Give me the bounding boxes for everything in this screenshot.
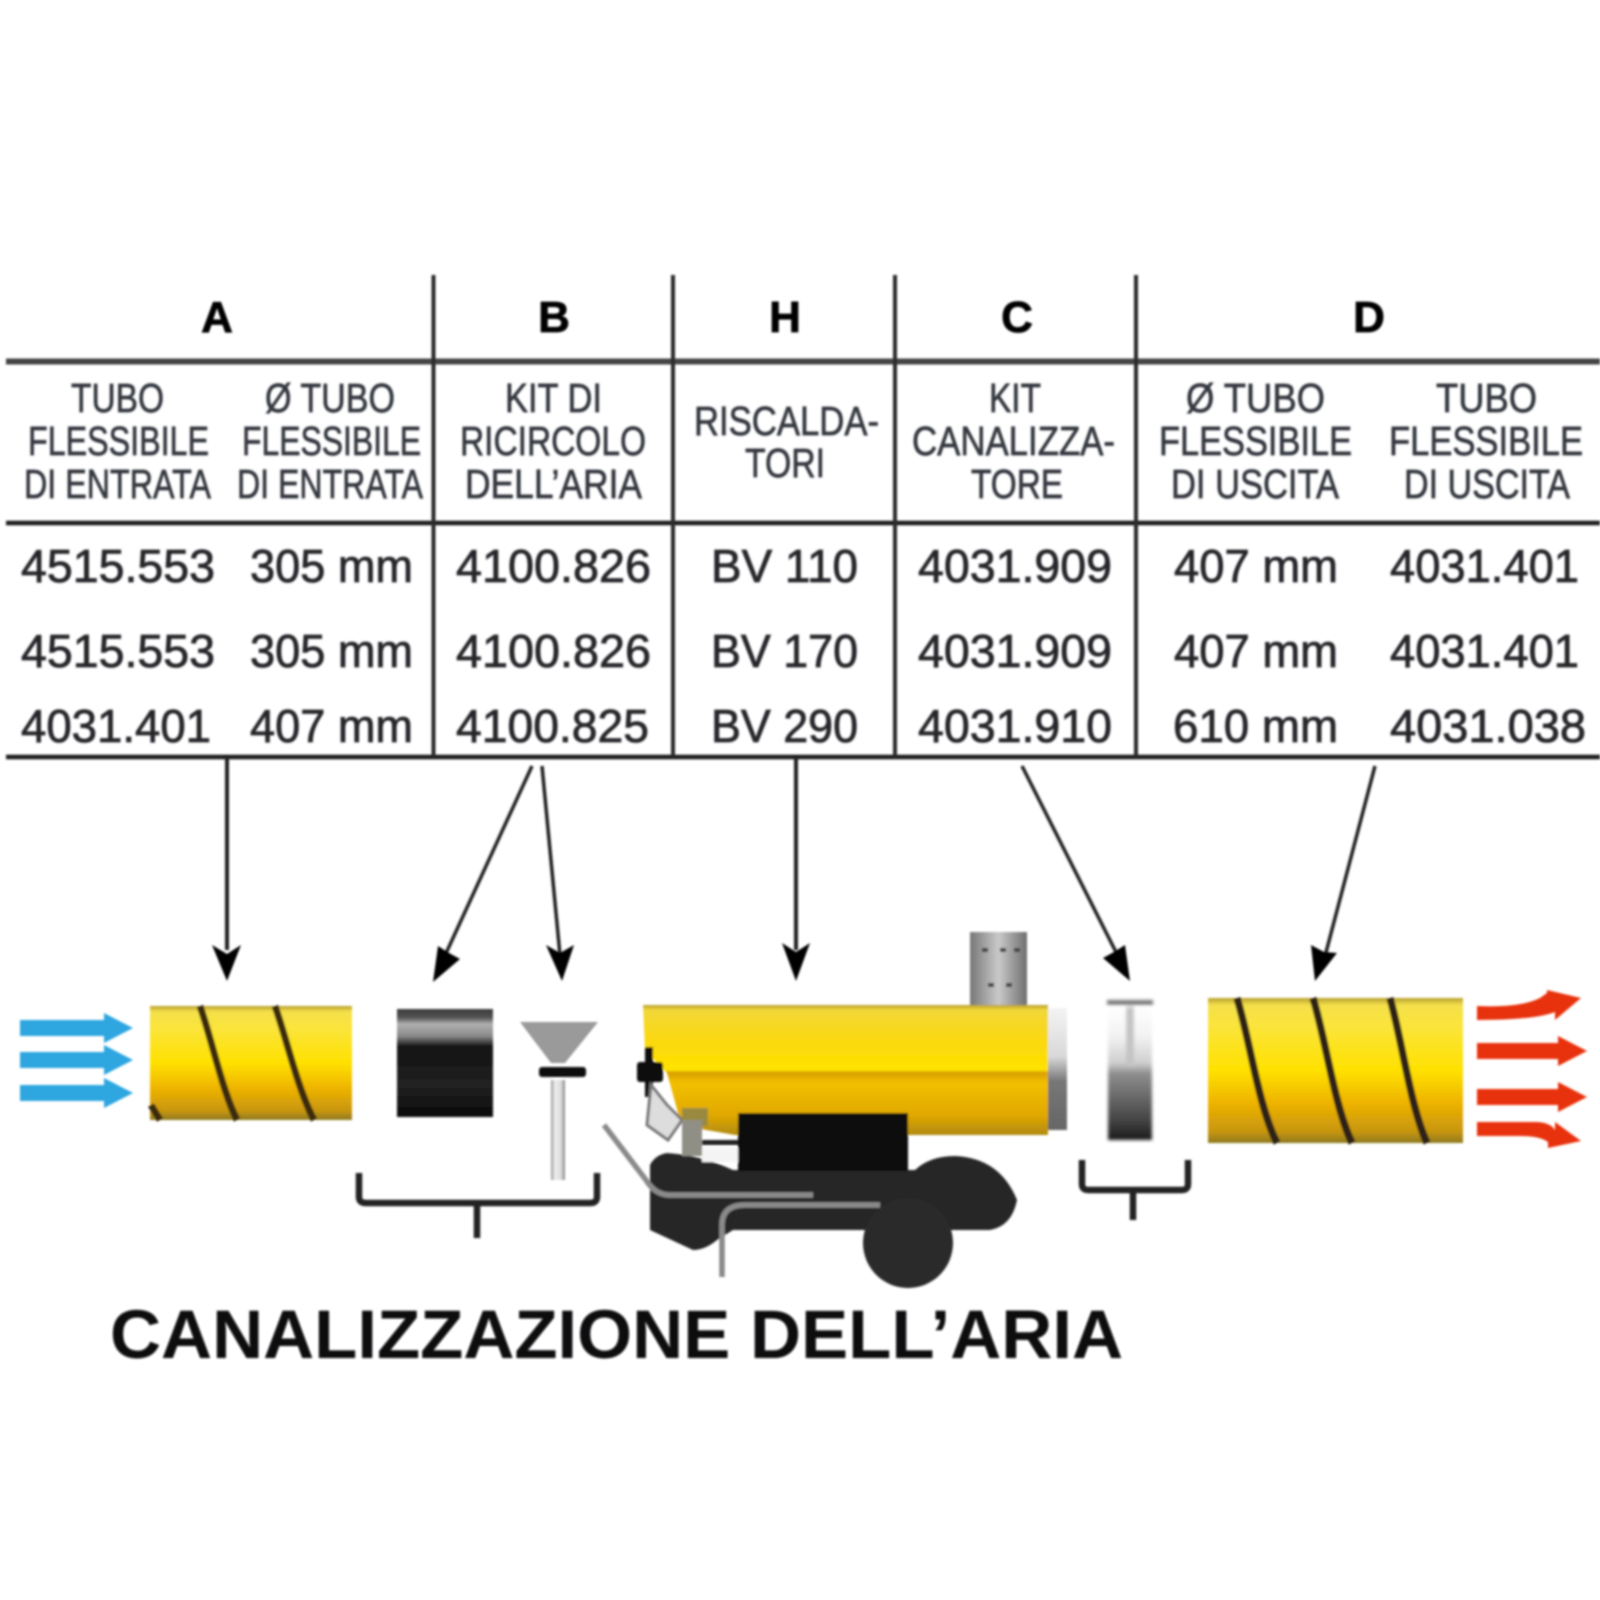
column headings: Ø TUBO (265, 375, 395, 421)
outlet flexible hose (1208, 998, 1463, 1143)
column headings: FLESSIBILE (28, 418, 209, 464)
data row 2: 4100.826 (456, 625, 651, 677)
column headings: DI USCITA (1404, 461, 1571, 507)
arrow: B to funnel (542, 766, 574, 981)
data row 3: 407 mm (250, 700, 413, 752)
heater (604, 932, 1067, 1288)
data row 3: 610 mm (1173, 700, 1338, 752)
data row 1: 305 mm (250, 540, 413, 592)
pointer arrows (212, 757, 1375, 982)
column headings: TORI (745, 440, 825, 486)
arrow: D to outlet hose (1311, 766, 1375, 981)
data row 3: 4031.038 (1390, 700, 1586, 752)
data row 3: 4031.401 (21, 700, 211, 752)
data row 1: 4515.553 (21, 540, 215, 592)
data row 2: 4031.909 (918, 625, 1112, 677)
column letters: B (538, 293, 570, 342)
column headings: DELL’ARIA (465, 461, 643, 507)
column headings: TORE (971, 461, 1063, 507)
column headings: RISCALDA- (694, 398, 879, 444)
column headings: TUBO (1436, 375, 1537, 421)
inlet flexible hose (150, 1006, 352, 1120)
column letters: D (1353, 293, 1385, 342)
bracket: recirculation kit (359, 1173, 597, 1238)
data row 3: BV 290 (711, 700, 858, 752)
column headings: RICIRCOLO (460, 418, 646, 464)
funnel fitting (520, 1022, 598, 1180)
column headings: CANALIZZA- (912, 418, 1115, 464)
data row 2: 305 mm (250, 625, 413, 677)
column headings: KIT (989, 375, 1041, 421)
heater fuel tank base (650, 1153, 1017, 1250)
inlet air arrows (20, 1013, 133, 1108)
column headings: Ø TUBO (1186, 375, 1325, 421)
data row 3: 4100.825 (456, 700, 649, 752)
column headings: DI ENTRATA (237, 461, 424, 507)
data row 2: 4031.401 (1390, 625, 1579, 677)
bracket: ducting kit (1082, 1160, 1188, 1220)
ducting kit (1107, 1000, 1153, 1140)
data row 3 (21, 700, 1586, 752)
column letters: C (1001, 293, 1033, 342)
column headings: DI USCITA (1171, 461, 1340, 507)
data row 2 (21, 625, 1579, 677)
table (6, 275, 1600, 757)
data row 1: BV 110 (711, 540, 858, 592)
data row 3: 4031.910 (918, 700, 1112, 752)
arrow: A to inlet hose (212, 757, 241, 981)
heater black box (738, 1113, 908, 1171)
arrow: B to recirculation box (433, 766, 532, 982)
heater rear cap (1047, 1008, 1067, 1130)
column headings: DI ENTRATA (24, 461, 212, 507)
column letters: A (201, 293, 233, 342)
arrow: H to heater (782, 757, 810, 981)
data row 1 (21, 540, 1579, 592)
column letters (201, 293, 1385, 342)
data row 1: 4031.401 (1390, 540, 1579, 592)
column headings: KIT DI (505, 375, 602, 421)
column letters: H (769, 293, 801, 342)
column headings: FLESSIBILE (1159, 418, 1352, 464)
heater handle frame (604, 1125, 880, 1277)
recirculation box (397, 1009, 493, 1117)
outlet air arrows (1477, 990, 1587, 1148)
data row 1: 407 mm (1174, 540, 1338, 592)
column headings (24, 375, 1583, 507)
arrow: C to ducting kit (1022, 766, 1130, 981)
heater yellow body (643, 1005, 1048, 1135)
data row 2: 4515.553 (21, 625, 215, 677)
title: CANALIZZAZIONE DELL’ARIA (110, 1296, 1123, 1373)
data row 1: 4031.909 (918, 540, 1112, 592)
table grid lines (6, 275, 1600, 757)
data row 2: 407 mm (1174, 625, 1338, 677)
data row 2: BV 170 (711, 625, 858, 677)
heater burner parts (637, 1047, 738, 1162)
heater wheel (863, 1198, 953, 1288)
heater chimney (970, 932, 1027, 1008)
data row 1: 4100.826 (456, 540, 651, 592)
column headings: TUBO (71, 375, 164, 421)
column headings: FLESSIBILE (242, 418, 421, 464)
